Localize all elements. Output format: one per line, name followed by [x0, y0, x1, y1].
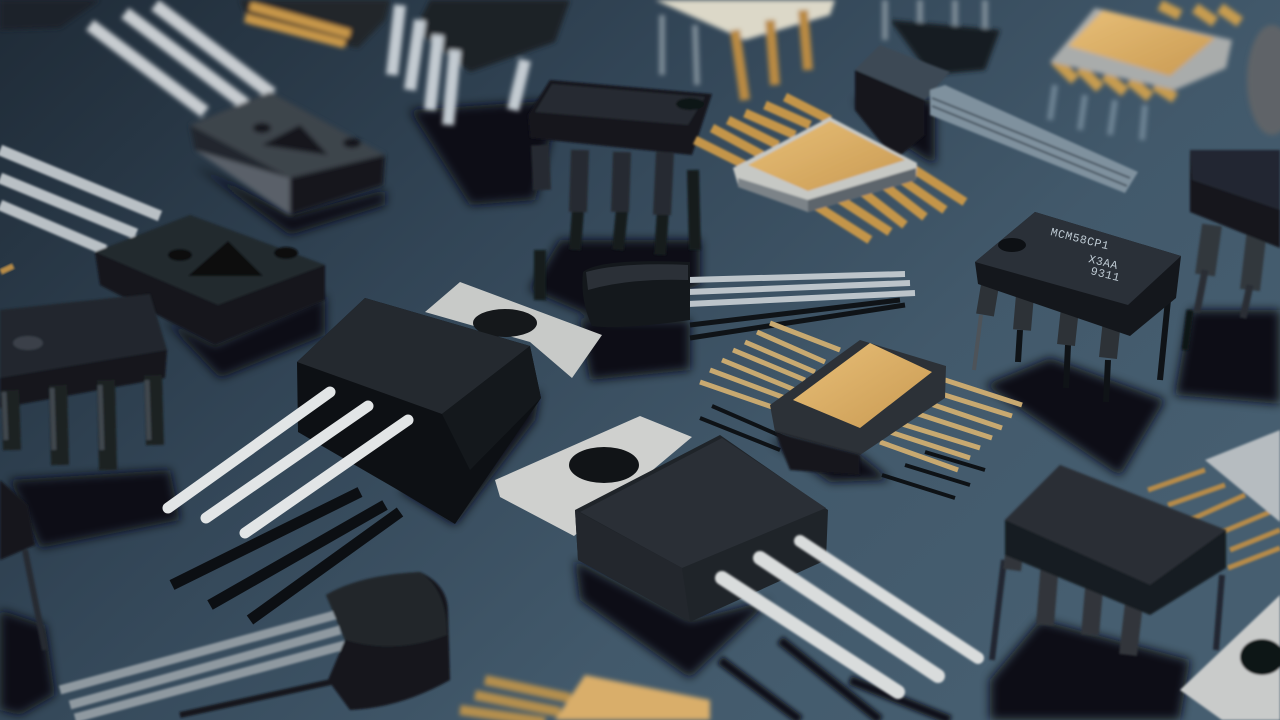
- component: small gold speck at left edge: [0, 263, 15, 275]
- chip marking text: [1049, 226, 1121, 285]
- component: right DIP chip with marking MCM58CP1: [974, 212, 1181, 402]
- component: grey lead fan and small black body: [855, 45, 1138, 193]
- chip marking text: 9311: [1089, 265, 1121, 285]
- component: lower-right white tab: [1180, 595, 1280, 720]
- component: top-centre DIP chip: [528, 80, 712, 300]
- component: top-centre DIP chip with white legs: [392, 0, 570, 125]
- chip marking text: X3AA: [1087, 253, 1119, 273]
- component: centre gold chip: [700, 323, 1022, 498]
- component: top gold chip centre: [695, 97, 965, 240]
- component: far-right DIP chip: [1185, 150, 1280, 350]
- component: bottom-left TO-92 transistor: [60, 572, 450, 718]
- component: TO-92 transistor centre: [582, 261, 915, 338]
- component: top-right gold chip: [1050, 5, 1240, 140]
- component: centre power transistor: [168, 298, 541, 620]
- component: lower-right DIP chip: [992, 465, 1226, 660]
- component: left power transistor: [0, 150, 325, 345]
- component: lower-left chip edge: [0, 480, 45, 650]
- component: bottom power transistor: [575, 435, 978, 720]
- component: bottom power transistor tab: [495, 416, 692, 536]
- chip marking text: MCM58CP1: [1049, 226, 1110, 253]
- component: lower-right silver chip and gold leads: [1148, 430, 1280, 568]
- component: top gold chip with legs: [655, 0, 1000, 100]
- component: bottom gold chip: [460, 675, 710, 720]
- component: left DIP chip: [0, 294, 167, 470]
- component: far-right silver disc: [1247, 25, 1280, 135]
- component: top-left power transistor: [0, 0, 390, 215]
- component: centre tab of power transistor: [425, 282, 602, 378]
